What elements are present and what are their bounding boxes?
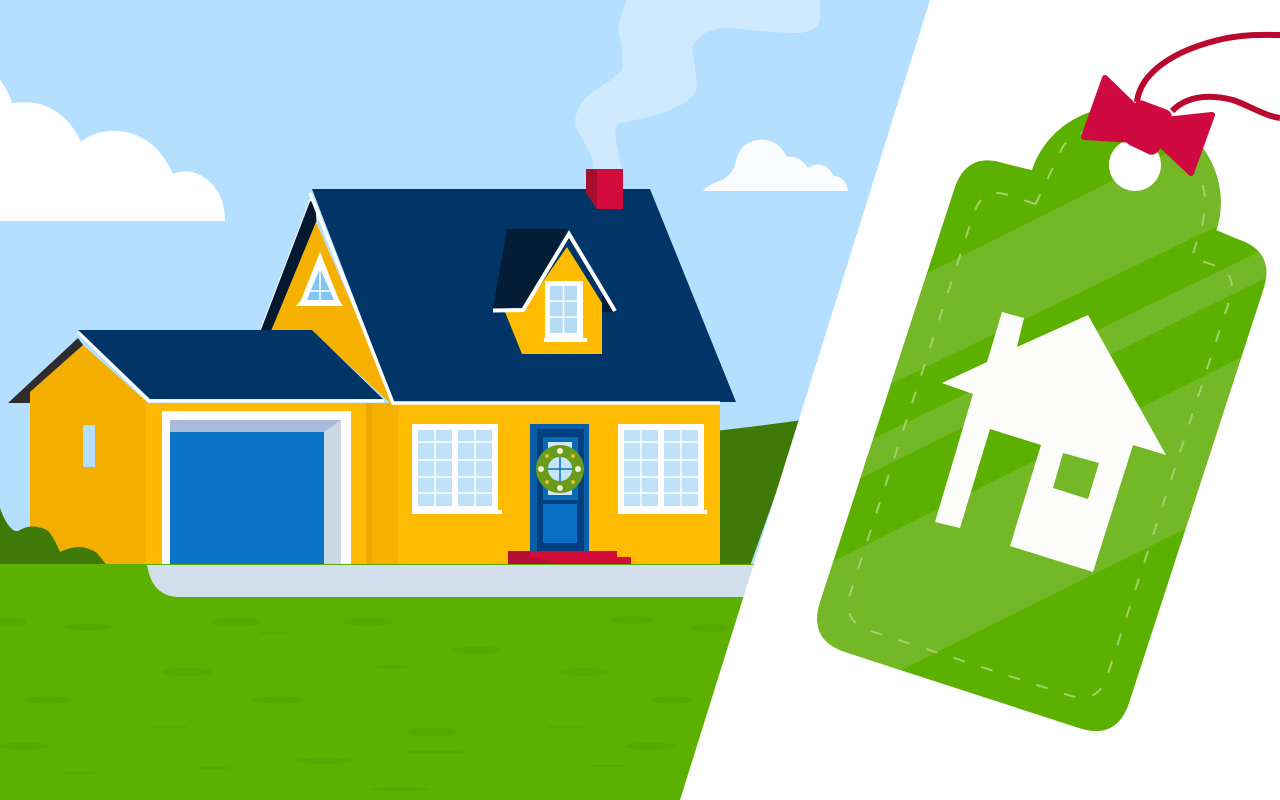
right window: [618, 424, 707, 514]
garage roof eave: [8, 338, 83, 403]
garage roof white trim: [78, 332, 384, 401]
white diagonal panel: [680, 0, 1280, 800]
tag light bands: [817, 148, 1266, 670]
gable: [260, 200, 395, 403]
bush: [0, 508, 106, 564]
cloud: left: [0, 80, 225, 221]
chimney smoke: [575, 0, 820, 170]
main wall: [372, 403, 720, 564]
dormer: [493, 229, 616, 354]
lawn: [0, 564, 800, 800]
chimney: [586, 169, 623, 209]
gable window: [296, 252, 343, 306]
small side window: [83, 425, 95, 467]
driveway: [147, 565, 760, 597]
sky background: [0, 0, 940, 800]
house: [8, 169, 736, 565]
main roof white trim: [310, 193, 720, 403]
front steps: [508, 551, 631, 564]
tag strings: [1137, 35, 1280, 118]
hill: [715, 420, 802, 566]
tag stitching: [841, 93, 1270, 705]
left window: [412, 424, 502, 514]
price tag: [800, 35, 1280, 740]
garage roof: [78, 330, 383, 399]
bow: [1084, 78, 1212, 173]
wreath: [538, 448, 581, 491]
house icon on tag: [935, 312, 1166, 572]
main roof: [312, 189, 736, 402]
grass tufts: [0, 616, 730, 791]
garage door: [162, 411, 351, 565]
front door: [530, 424, 589, 552]
tag body: [808, 61, 1280, 740]
garage wall: [30, 345, 373, 565]
tag hole: [1109, 139, 1161, 191]
cloud: right: [703, 139, 848, 191]
